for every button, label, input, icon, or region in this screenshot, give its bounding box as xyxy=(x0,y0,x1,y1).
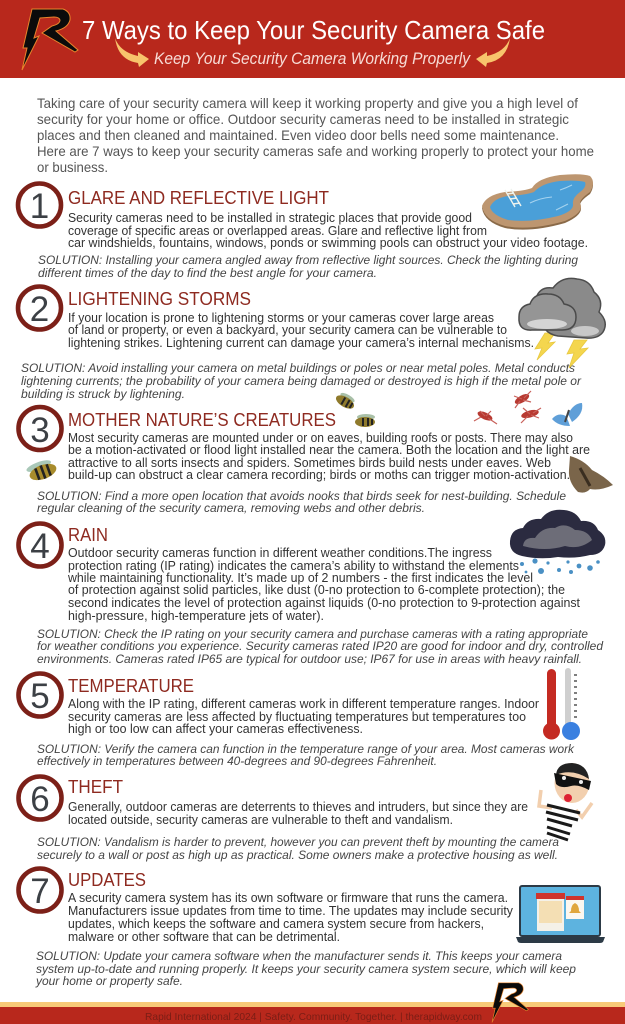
solution: glare: different times of the day to find the best angle for your camera. xyxy=(38,266,377,280)
panel: section 5 temperature xyxy=(18,668,580,768)
footer text: Rapid International 2024 | Safety. Community. Together. | therapidway.com xyxy=(145,1011,482,1023)
solution: rain: for weather conditions you experience. Security cameras rated IP20 are good for indoor and dry, controlled xyxy=(37,639,604,653)
body: temperature xyxy=(68,697,539,736)
icon: blue butterfly xyxy=(552,403,582,426)
body: glare: car windshields, fountains, windows, ponds or swimming pools can obstruct your video footage. xyxy=(68,236,588,250)
solution: rain: SOLUTION: Check the IP rating on your security camera and purchase cameras with a rating appropriate xyxy=(37,627,588,641)
number badge 7 xyxy=(18,868,62,912)
number badge 2 xyxy=(18,286,61,330)
icon: rain cloud xyxy=(510,510,605,574)
solution: lightening storms: SOLUTION: Avoid installing your camera on metal buildings or poles or near metal poles. Metal conducts xyxy=(21,361,575,375)
body: updates xyxy=(68,891,514,944)
panel: section 7 updates xyxy=(18,868,605,988)
body: theft: Generally, outdoor cameras are deterrents to thieves and intruders, but since they are xyxy=(68,800,528,814)
icon: blue thermometer xyxy=(562,668,580,740)
solution: updates xyxy=(35,949,576,988)
solution: lightening storms xyxy=(21,361,582,401)
number badge 5 xyxy=(18,674,62,716)
icon: swimming pool xyxy=(482,174,593,230)
panel: section 1 glare xyxy=(18,174,593,280)
body: creatures: attractive to all sorts insects and spiders. Sometimes birds build nests under eaves. Web xyxy=(68,456,551,470)
heading: rain: RAIN xyxy=(68,524,108,545)
icon: red bug lower xyxy=(520,408,541,423)
solution: rain xyxy=(37,627,604,666)
body: temperature: high or too low can affect your cameras effectiveness. xyxy=(68,722,363,736)
icon: storm clouds with lightning xyxy=(519,278,605,368)
heading: temperature: TEMPERATURE xyxy=(68,675,194,696)
text block: introduction xyxy=(37,96,594,175)
body: glare: coverage of specific areas or overlapped areas. Glare and reflective light from xyxy=(68,224,487,238)
panel: section 4 rain xyxy=(18,510,605,666)
arrow: right xyxy=(476,38,510,67)
number badge 4 xyxy=(18,524,62,566)
icon: red bug left xyxy=(474,409,497,424)
body: updates: A security camera system has its own software or firmware that runs the camera. xyxy=(68,891,508,905)
number badge 3 xyxy=(18,407,62,450)
body: updates: Manufacturers issue updates from time to time. The updates may include security xyxy=(68,904,514,918)
text block: introduction: Here are 7 ways to keep your security cameras safe and working properly to protect your home xyxy=(37,144,594,159)
number badge 5: 5 xyxy=(30,677,50,716)
solution: updates: SOLUTION: Update your camera software when the manufacturer sends it. This keeps your camera xyxy=(36,949,562,963)
panel: section 2 lightening storms xyxy=(18,278,605,401)
body: updates: updates, which keeps the software and camera system secure from hackers, xyxy=(68,917,484,931)
body: creatures xyxy=(68,431,590,482)
body: lightening storms xyxy=(68,311,534,350)
body: lightening storms: of land or property, or even a backyard, your security camera can be vulnerable to xyxy=(68,323,507,337)
number badge 6 xyxy=(18,776,62,820)
solution: temperature: effectively in temperatures between 40-degrees and 90-degrees Fahrenheit. xyxy=(37,754,437,768)
body: rain: high-pressure, high-temperature jets of water). xyxy=(68,609,324,623)
number badge 7: 7 xyxy=(30,872,50,911)
heading: creatures: MOTHER NATURE’S CREATURES xyxy=(68,409,336,430)
icon: brown moth xyxy=(569,456,613,493)
panel: header banner xyxy=(0,0,625,78)
body: creatures: build-up can obstruct a clear camera recording; birds or moths can trigger motion-activation. xyxy=(68,468,570,482)
solution: temperature: SOLUTION: Verify the camera can function in the temperature range of your area. Most cameras work xyxy=(37,742,575,756)
solution: glare xyxy=(38,253,578,280)
footer xyxy=(0,983,625,1024)
body: theft: located outside, security cameras are vulnerable to theft and vandalism. xyxy=(68,813,453,827)
text block: introduction: or business. xyxy=(37,160,108,175)
solution: theft xyxy=(37,835,559,862)
body: updates: malware or other software that can be detrimental. xyxy=(68,930,340,944)
panel: section 6 theft xyxy=(18,763,592,862)
panel: section 3 creatures xyxy=(18,390,613,515)
heading: glare: GLARE AND REFLECTIVE LIGHT xyxy=(68,187,329,208)
solution: lightening storms: building is struck by lightening. xyxy=(21,387,185,401)
body: temperature: Along with the IP rating, different cameras work in different temperature ranges. Indoor xyxy=(68,697,539,711)
solution: creatures: regular cleaning of the security camera, removing webs and other debris. xyxy=(37,501,425,515)
body: rain: of protection against solid particles, like dust (0-no protection to 6-complete protection); the xyxy=(68,583,565,597)
body: temperature: security cameras are less affected by fluctuating temperatures but temperatures too xyxy=(68,710,526,724)
number badge 4: 4 xyxy=(30,527,50,566)
number badge 1 xyxy=(18,184,61,226)
body: creatures: be a motion-activated or flood light installed near the camera. Both the location and the light are xyxy=(68,443,590,457)
solution: creatures: SOLUTION: Find a more open location that avoids nooks that birds seek for nest-building. Schedule xyxy=(37,489,566,503)
number badge 1: 1 xyxy=(30,187,49,226)
body: lightening storms: If your location is prone to lightening storms or your cameras cover large areas xyxy=(68,311,494,325)
number badge 6: 6 xyxy=(30,780,50,819)
body: rain: protection rating (IP rating) indicates the camera’s ability to withstand the elements xyxy=(68,559,519,573)
subtitle: Keep Your Security Camera Working Properly xyxy=(154,49,471,68)
solution: updates: system up-to-date and running properly. It keeps your security camera system secure, which will keep xyxy=(36,962,576,976)
body: rain: second indicates the level of protection against liquids (0-no protection to 9-protection against xyxy=(68,596,580,610)
heading: lightening storms: LIGHTENING STORMS xyxy=(68,288,251,309)
body: lightening storms: lightening strikes. Lightening current can damage your camera’s internal mechanisms. xyxy=(68,336,534,350)
body: rain: Outdoor security cameras function in different weather conditions.The ingress xyxy=(68,546,492,560)
body: rain xyxy=(67,546,580,623)
solution: temperature xyxy=(37,742,575,768)
body: creatures: Most security cameras are mounted under or on eaves, building roofs or posts. There may also xyxy=(68,431,573,445)
body: glare xyxy=(68,211,588,250)
icon: thief xyxy=(539,763,592,840)
title: 7 Ways to Keep Your Security Camera Safe xyxy=(82,15,545,45)
solution: lightening storms: lightening currents; the probability of your camera being damaged or destroyed is high if the metal pole or xyxy=(21,374,582,388)
icon: bee lower xyxy=(355,414,375,427)
icon: red bug top xyxy=(513,391,531,408)
icon: bee top xyxy=(334,390,358,411)
body: theft xyxy=(68,800,528,827)
number badge 3: 3 xyxy=(30,411,50,450)
icon: laptop with calendar xyxy=(516,886,605,943)
solution: theft: SOLUTION: Vandalism is harder to prevent, however you can prevent theft by mounting the camera xyxy=(37,835,559,849)
text block: introduction: security for your home or office. Outdoor security cameras need to be installed in strategic xyxy=(37,112,569,127)
solution: glare: SOLUTION: Installing your camera angled away from reflective light sources. Check the lighting during xyxy=(38,253,578,267)
body: rain: while maintaining functionality. It’s made up of 2 numbers - the first indicates the level xyxy=(67,571,533,585)
heading: updates: UPDATES xyxy=(68,869,146,890)
text block: introduction: places and then cleaned and maintained. Even video door bells need some maintenance. xyxy=(37,128,559,143)
solution: updates: your home or property safe. xyxy=(35,974,183,988)
icon: footer logo xyxy=(492,983,528,1022)
heading: theft: THEFT xyxy=(68,776,123,797)
body: glare: Security cameras need to be installed in strategic places that provide good xyxy=(68,211,472,225)
icon: bee left xyxy=(25,457,59,484)
icon: Rapid logo xyxy=(22,9,78,70)
solution: creatures xyxy=(37,489,566,515)
number badge 2: 2 xyxy=(30,290,49,329)
text block: introduction: Taking care of your security camera will keep it working property and give you a high level of xyxy=(37,96,578,111)
arrow: left xyxy=(115,38,149,67)
icon: red thermometer xyxy=(543,669,560,740)
solution: theft: securely to a wall or post as high up as practical. Some owners make a protective housing as well. xyxy=(37,848,558,862)
solution: rain: environments. Cameras rated IP65 are typical for outdoor use; IP67 for use in areas with heavy rainfall. xyxy=(37,652,582,666)
